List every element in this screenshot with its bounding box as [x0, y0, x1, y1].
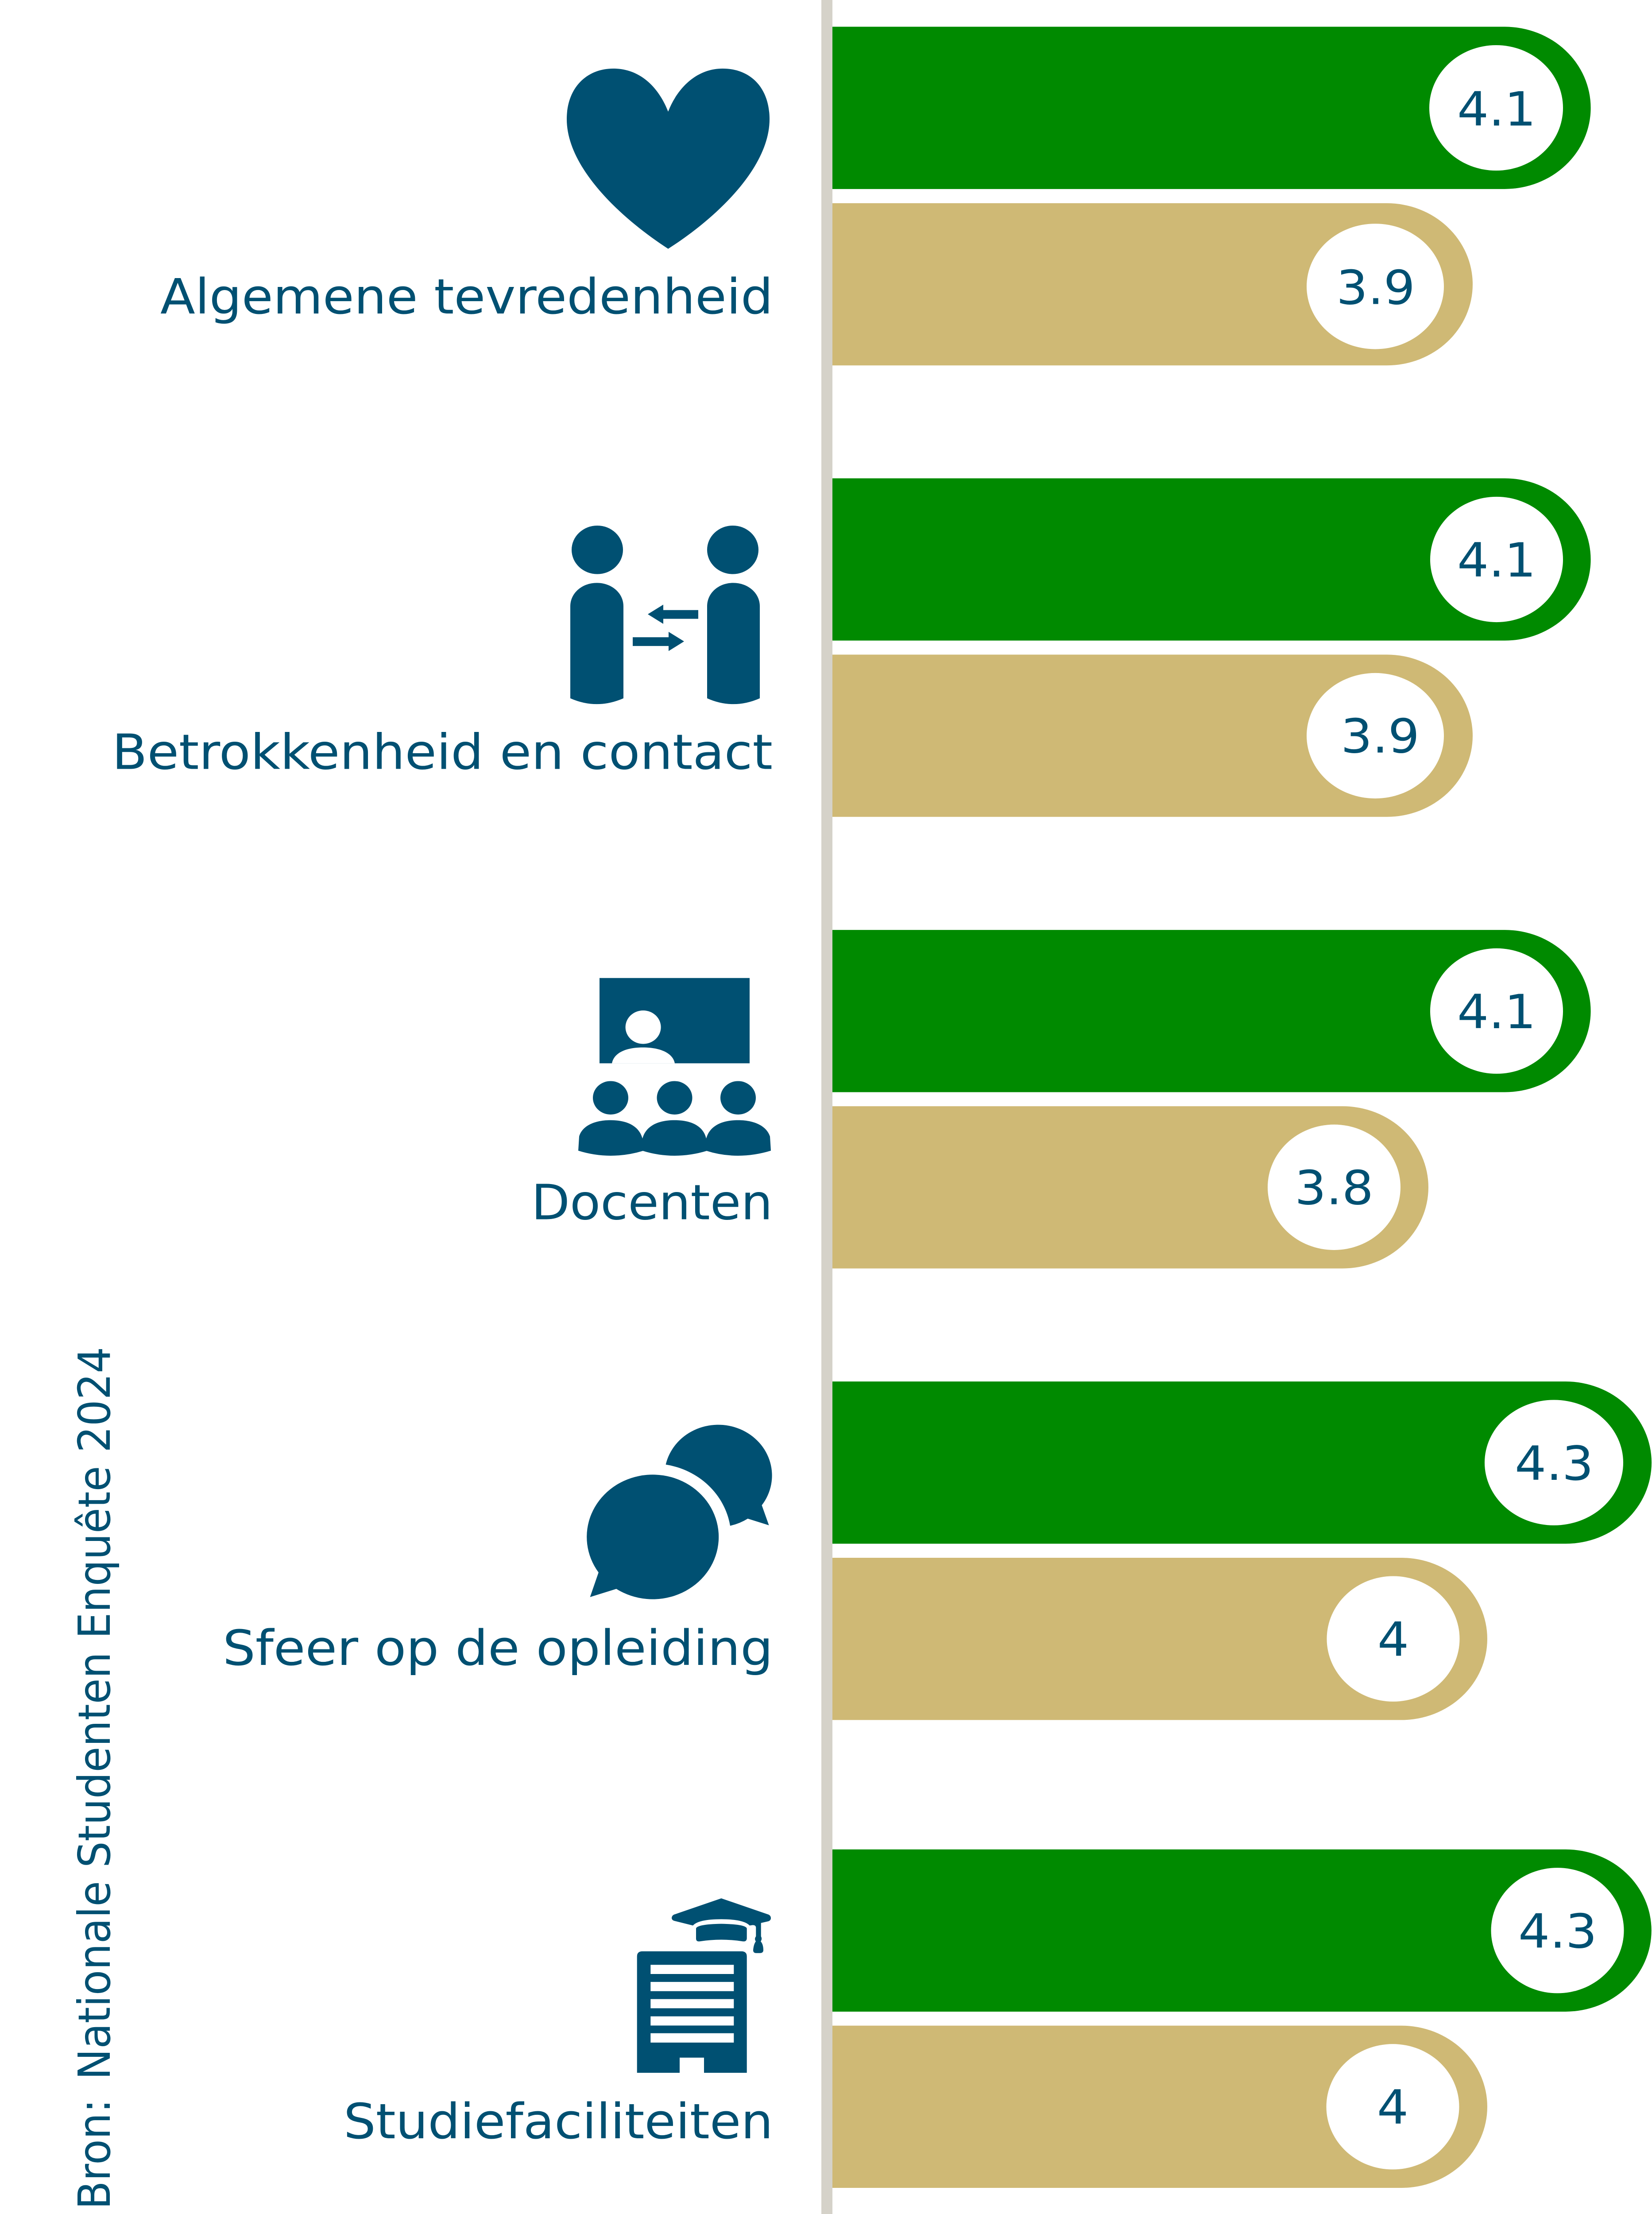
tan bar 3.9: 3.9 [1341, 709, 1420, 764]
row: Betrokkenheid en contact [112, 478, 1591, 817]
tan bar 4: 4 [1377, 1612, 1409, 1667]
row: Sfeer op de opleiding [223, 1382, 1652, 1720]
green bar 4.3 [832, 1850, 1652, 2012]
green bar 4.1 [832, 27, 1591, 189]
green bar 4.1: 4.1 [1457, 82, 1536, 137]
tan bar 3.9 [832, 203, 1473, 365]
source note: Bron: Nationale Studenten Enquête 2024 [69, 1347, 120, 2210]
row: Studiefaciliteiten [344, 1850, 1652, 2188]
icon: teacher and class [578, 978, 771, 1156]
icon: building with graduation cap [637, 1898, 771, 2073]
green bar 4.1: 4.1 [1457, 533, 1536, 588]
green bar 4.3 [832, 1382, 1652, 1544]
label: Algemene tevredenheid [160, 268, 773, 325]
icon: heart [567, 69, 770, 249]
tan bar 3.9: 3.9 [1336, 260, 1415, 315]
green bar 4.3: 4.3 [1518, 1904, 1597, 1959]
icon: speech bubbles [587, 1425, 772, 1599]
row: Docenten [531, 930, 1591, 1269]
tan bar 3.8: 3.8 [1295, 1161, 1373, 1215]
tan bar 4 [832, 1558, 1487, 1720]
label: Sfeer op de opleiding [223, 1620, 773, 1676]
green bar 4.1 [832, 930, 1591, 1092]
label: Betrokkenheid en contact [112, 724, 773, 781]
tan bar 3.9 [832, 654, 1473, 817]
row: Algemene tevredenheid [160, 27, 1591, 365]
icon: two people exchanging [570, 526, 760, 704]
vertical axis line [821, 0, 832, 2214]
green bar 4.1: 4.1 [1457, 985, 1536, 1039]
tan bar 4: 4 [1377, 2080, 1408, 2135]
label: Docenten [531, 1174, 773, 1231]
green bar 4.3: 4.3 [1515, 1436, 1594, 1491]
label: Studiefaciliteiten [344, 2093, 773, 2150]
green bar 4.1 [832, 478, 1591, 641]
tan bar 3.8 [832, 1106, 1428, 1269]
tan bar 4 [832, 2026, 1487, 2188]
